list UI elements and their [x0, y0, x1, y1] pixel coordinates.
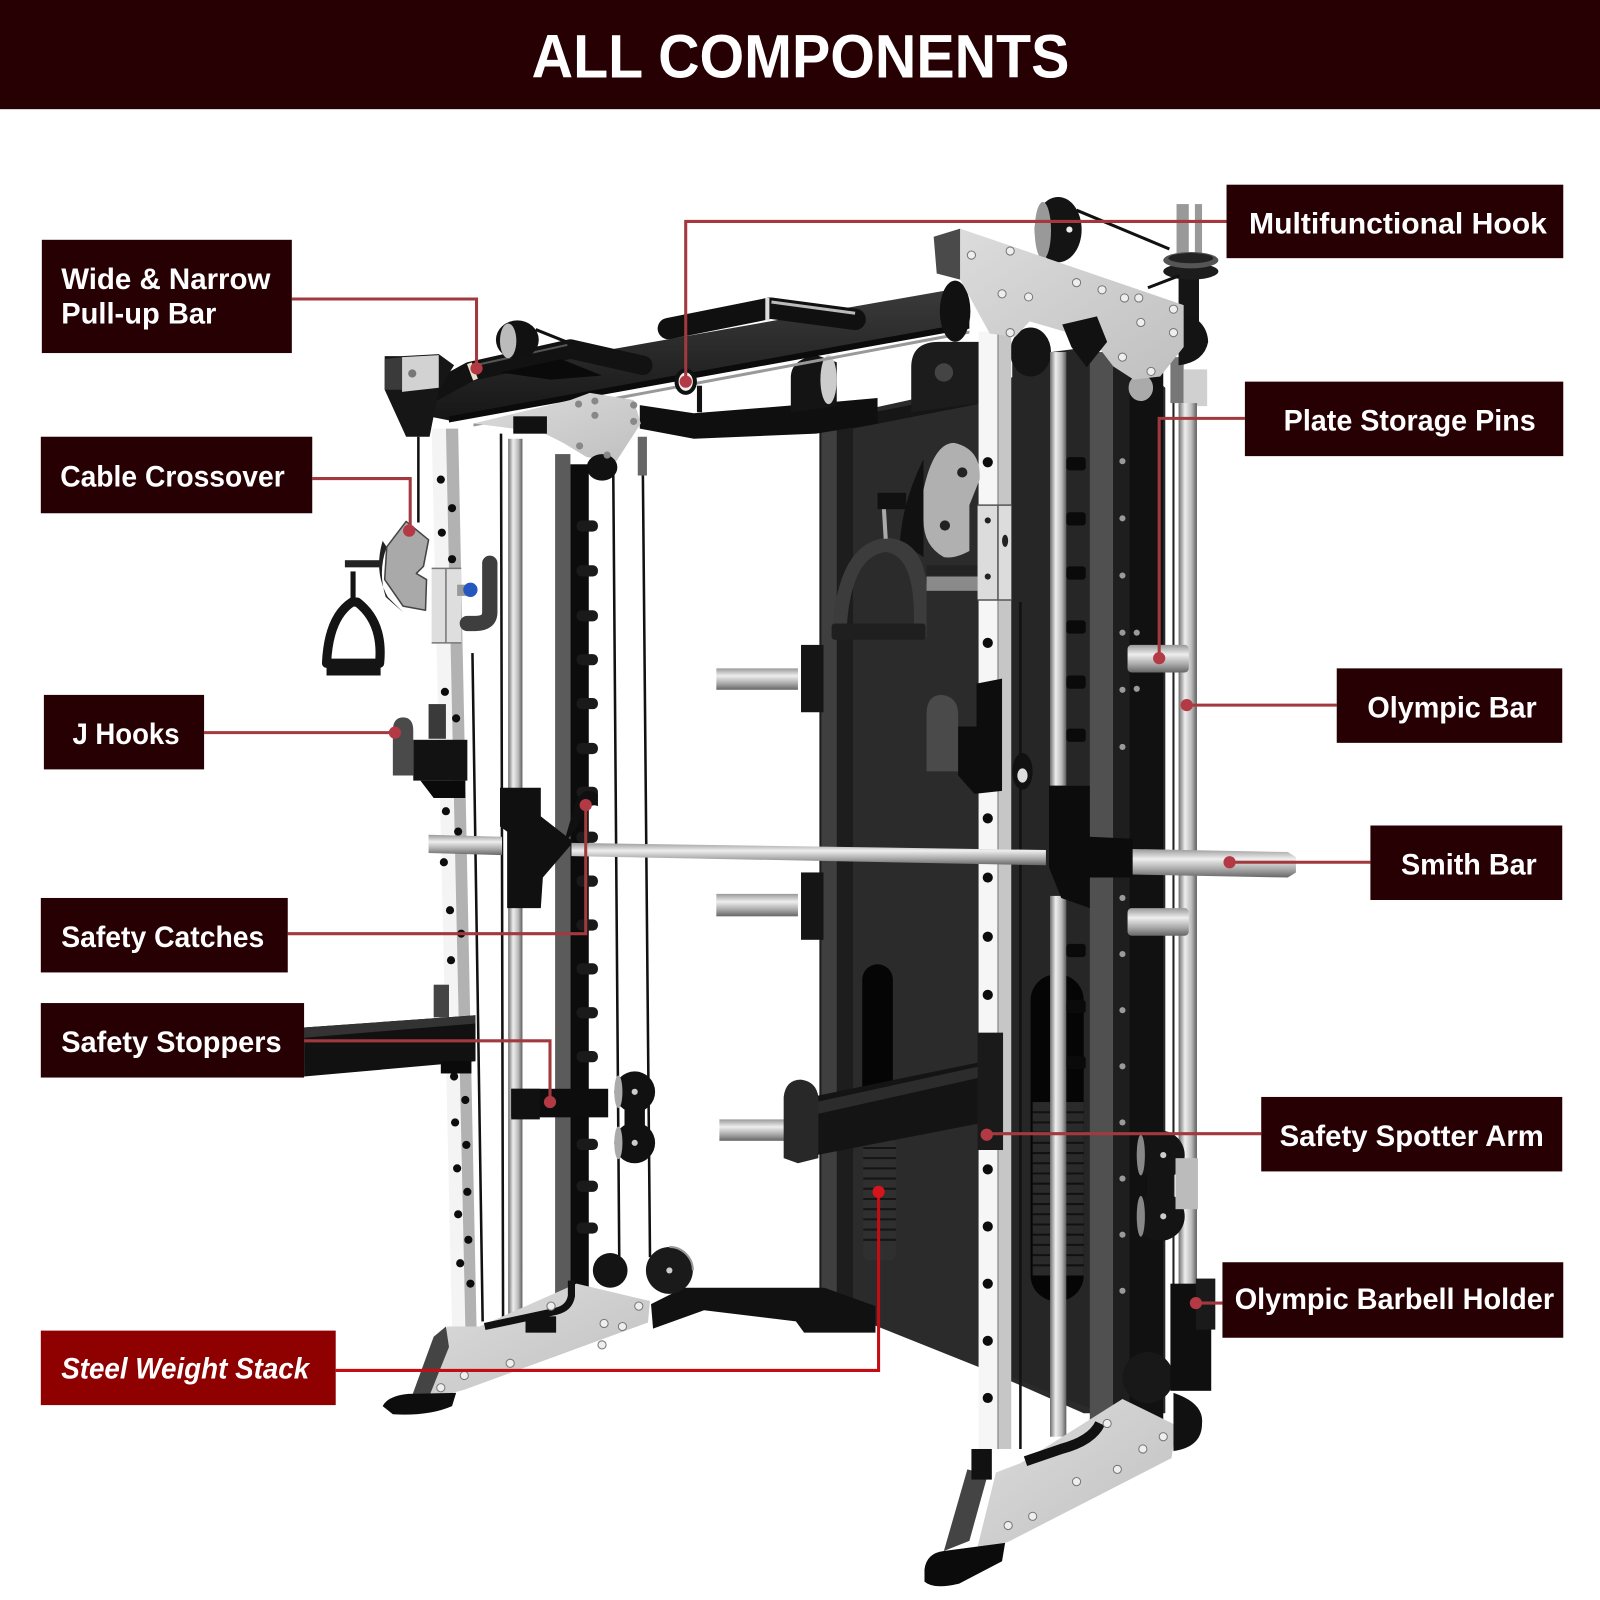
left foot [383, 1327, 456, 1415]
right cable [1019, 602, 1022, 1449]
callout: wide and narrow pull-up bar: Wide & Narrow [61, 263, 271, 296]
front column holes [983, 457, 993, 1403]
right lower rail elbow [1026, 1423, 1100, 1461]
lower left pulleys [593, 1247, 693, 1294]
rear black upright [1113, 362, 1163, 1423]
callout: safety catches: Safety Catches [61, 921, 264, 954]
safety stopper left [511, 1089, 608, 1119]
left silver column [432, 429, 477, 1327]
shroud slot left [862, 964, 893, 1143]
right spotter arm [784, 1033, 1003, 1163]
plate storage chrome pins [1128, 645, 1189, 936]
callout: safety spotter arm [981, 1097, 1562, 1171]
left pulley body [345, 521, 429, 612]
rear gray upright [1090, 352, 1113, 1434]
callout: smith bar: Smith Bar [1401, 848, 1537, 881]
rear middle pulley [791, 355, 837, 412]
title: ALL COMPONENTS [532, 23, 1069, 91]
callout: wide and narrow pull-up bar: Pull-up Bar [61, 297, 217, 330]
callout: multifunctional hook: Multifunctional Hook [1249, 208, 1547, 241]
header band [0, 0, 1600, 109]
left J hook [393, 704, 467, 798]
lower back beam [651, 1288, 876, 1333]
left bottom plate bolts [437, 1302, 643, 1392]
olympic bar pole [1163, 204, 1218, 1286]
rail pegs [577, 520, 598, 1234]
right foot [924, 1449, 1005, 1586]
cable chain [638, 437, 647, 476]
left column holes [437, 476, 474, 1288]
callout: olympic barbell holder: Olympic Barbell Holder [1235, 1283, 1555, 1316]
upper back beam [640, 398, 878, 439]
left spotter arm [304, 985, 476, 1077]
right bottom plate bolts [1004, 1419, 1167, 1530]
safety catch and smith carriage left [500, 788, 598, 908]
shroud slot right [1031, 974, 1084, 1301]
left lower rail elbow [485, 1281, 571, 1327]
right handle [832, 493, 927, 640]
multifunctional hook [674, 368, 702, 412]
olympic barbell holder [1170, 1279, 1215, 1391]
small pulley under plate right [1129, 374, 1153, 401]
callout: safety catches [41, 799, 592, 972]
black corner behind top plate [1179, 311, 1208, 365]
pulley under plate left [940, 281, 970, 342]
front silver column [979, 332, 1011, 1449]
callout: wide and narrow pull-up bar [42, 240, 483, 374]
callout: cable crossover: Cable Crossover [60, 461, 285, 494]
callout: steel weight stack: Steel Weight Stack [61, 1353, 311, 1386]
top left pulley [496, 320, 587, 359]
wide pull-up handle [412, 349, 643, 403]
right carriage slider [978, 505, 1011, 600]
pulley behind top plate [1010, 328, 1051, 377]
top plate bolts [967, 247, 1178, 376]
black J handle [467, 563, 490, 623]
callout: plate storage pins: Plate Storage Pins [1284, 405, 1536, 438]
shroud back panel [849, 352, 1165, 1413]
narrow pull-up handle [668, 308, 855, 329]
right pulley discs [900, 459, 923, 557]
right bottom plate [976, 1399, 1177, 1555]
left carriage slider [432, 568, 461, 643]
rear pegs [1066, 457, 1086, 1069]
callout: safety stoppers: Safety Stoppers [61, 1026, 282, 1059]
storage pins [716, 645, 823, 1141]
top beam [413, 291, 969, 420]
callout: steel weight stack [41, 1186, 885, 1405]
blue pin knob [457, 583, 478, 597]
callout: plate storage pins [1153, 382, 1563, 664]
callout: safety spotter arm: Safety Spotter Arm [1280, 1120, 1544, 1153]
callout: cable crossover [41, 437, 415, 537]
back upper pulley housing [911, 342, 980, 412]
left bottom plate [426, 1284, 650, 1400]
right J hook [927, 679, 1033, 794]
top left corner block [385, 354, 454, 437]
top right pulley [1035, 197, 1180, 288]
shroud dark upright [819, 416, 853, 1332]
left guide rod [508, 439, 522, 1316]
smith bar [429, 786, 1296, 908]
functional trainer machine illustration [304, 197, 1296, 1586]
right pulley bolts [940, 467, 967, 531]
cables [418, 434, 650, 1321]
carriage stub [927, 565, 978, 591]
right pulley body [923, 443, 980, 558]
left black rail [555, 454, 570, 1301]
callout: olympic bar [1181, 668, 1562, 743]
callout: J hooks: J Hooks [72, 718, 180, 751]
callout: multifunctional hook [680, 185, 1563, 388]
callout: smith bar [1223, 826, 1562, 900]
left handle [327, 571, 381, 668]
callout: safety stoppers [41, 1003, 556, 1108]
rear guide rod right [1050, 352, 1066, 786]
callout: J hooks [44, 695, 401, 769]
callout: olympic barbell holder [1190, 1262, 1563, 1338]
top right plate [934, 229, 1184, 380]
rear bottom pulley [1122, 1352, 1173, 1403]
right lower double pulley [1136, 1131, 1198, 1241]
left gusset plate [473, 393, 641, 481]
left lower double pulley [614, 1071, 655, 1163]
weight stack right [1033, 1102, 1084, 1276]
rear bolts [1119, 458, 1140, 1294]
weight stack left [863, 1138, 896, 1260]
callout: olympic bar: Olympic Bar [1367, 691, 1537, 724]
right base black end [1173, 1393, 1202, 1451]
